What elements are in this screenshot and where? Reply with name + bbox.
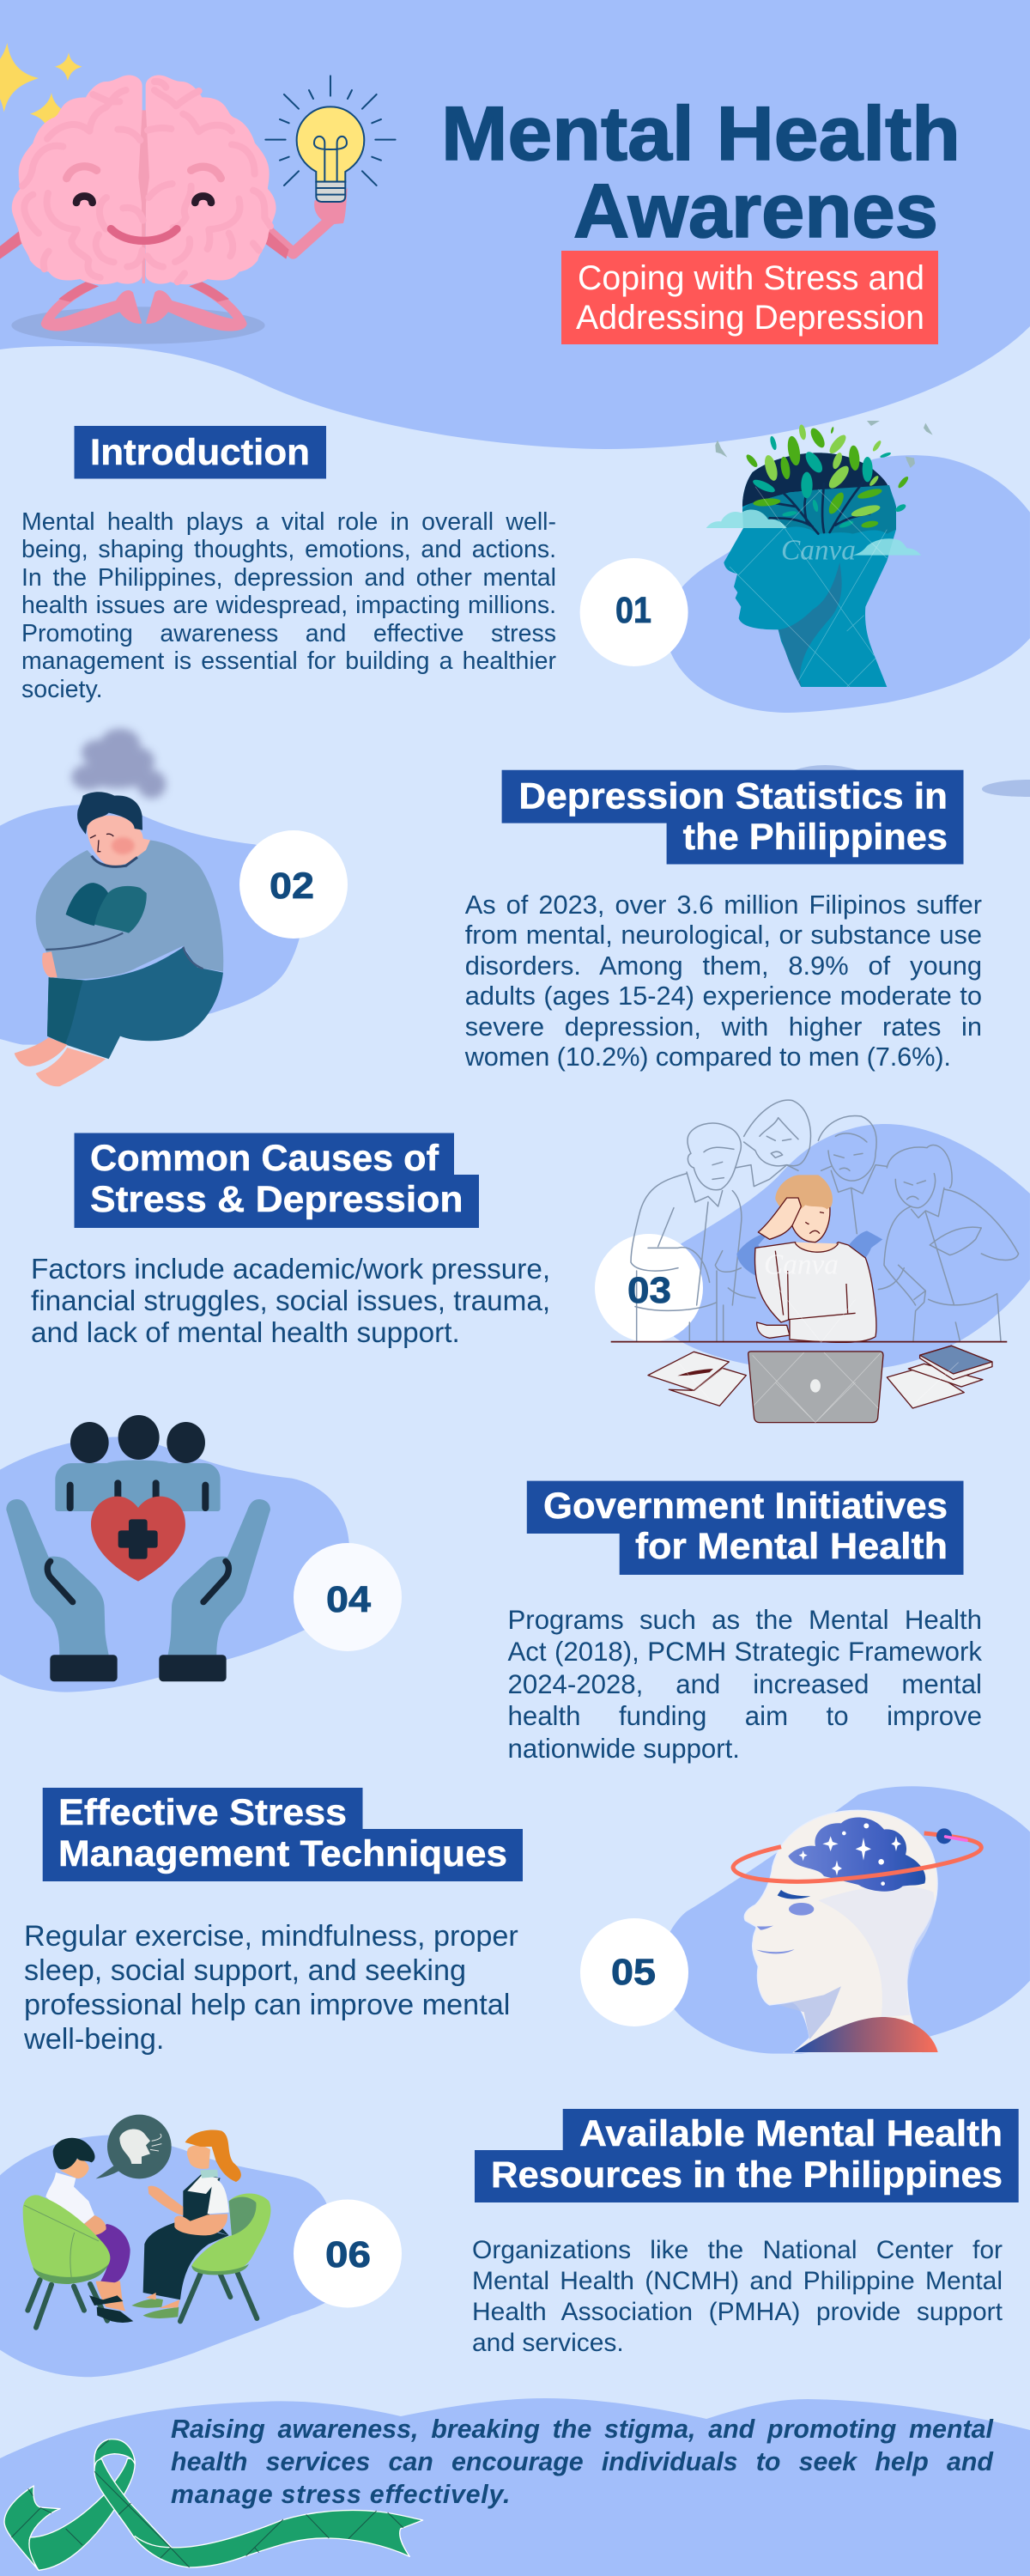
closing statement: manage stress effectively. <box>171 2480 511 2509</box>
heading: Common Causes: Common Causes of <box>90 1138 439 1179</box>
icon: profile head with starry cloud and orbit <box>733 1810 981 2052</box>
icon: green awareness ribbon <box>4 2439 423 2570</box>
header background wave <box>0 0 1030 449</box>
blob 04 <box>0 1437 349 1692</box>
heading: Government Initiatives: Government Initiatives <box>543 1485 948 1527</box>
number badge 06 <box>294 2200 402 2308</box>
text block: depression statistics: severe depression, with higher rates in <box>465 1012 982 1042</box>
text block: stress management <box>24 1920 518 2056</box>
text block: depression statistics: adults (ages 15-24) experience moderate to <box>465 981 982 1011</box>
number badge 03 circle <box>595 1234 703 1342</box>
text block: stress management: professional help can improve mental <box>24 1989 510 2021</box>
heading: Common Causes: Stress & Depression <box>90 1179 464 1220</box>
closing statement: Raising awareness, breaking the stigma, and promoting mental <box>171 2415 993 2444</box>
text block: available resources: Organizations like the National Center for <box>472 2236 1003 2263</box>
heading: Common Causes <box>74 1133 479 1228</box>
heading: Introduction <box>74 426 326 479</box>
text block: introduction: society. <box>21 676 103 703</box>
heading: Depression Statistics <box>502 770 963 864</box>
panel: government initiatives illustration and number <box>0 1415 402 1692</box>
icon: caring hands, people and heart <box>6 1415 270 1681</box>
blob 01 <box>670 455 1030 713</box>
text block: depression statistics: As of 2023, over 3.6 million Filipinos suffer <box>465 890 982 920</box>
icon: head with growing tree <box>706 421 933 687</box>
blob 06 <box>0 2136 337 2377</box>
number badge 01: 01 <box>615 590 651 631</box>
panel: stress management illustration and number <box>580 1786 1030 2054</box>
text block: introduction: management is essential for building a healthier <box>21 647 556 675</box>
text block: government initiatives: nationwide support. <box>508 1734 740 1764</box>
number badge 06: 06 <box>325 2234 371 2275</box>
decorative side ellipse <box>794 765 1030 797</box>
text block: government initiatives: Act (2018), PCMH Strategic Framework <box>508 1637 982 1667</box>
blob 02 <box>0 805 305 1045</box>
icon: two people talking in chairs <box>23 2115 270 2328</box>
number badge 02: 02 <box>270 866 314 907</box>
heading: Government Initiatives: for Mental Health <box>635 1526 948 1567</box>
text block: available resources: Mental Health (NCMH) and Philippine Mental <box>472 2267 1003 2294</box>
heading: Introduction: Introduction <box>90 432 310 473</box>
text block: common causes <box>31 1254 550 1349</box>
panel: causes illustration and number <box>595 1100 1030 1423</box>
illustration: smiling brain holding a light bulb <box>0 43 396 344</box>
title <box>441 90 960 253</box>
icon: sparkles <box>0 43 82 135</box>
text block: government initiatives: health funding aim to improve <box>508 1701 982 1731</box>
icon: stressed person surrounded by critics <box>611 1100 1019 1423</box>
text block: depression statistics <box>465 890 982 1072</box>
text block: depression statistics: from mental, neurological, or substance use <box>465 920 982 950</box>
text block: introduction: health issues are widespread, impacting millions. <box>21 592 556 619</box>
icon: light bulb <box>265 76 396 202</box>
text block: depression statistics: women (10.2%) compared to men (7.6%). <box>465 1042 951 1072</box>
panel: depression statistics illustration and number <box>0 728 1030 1086</box>
subtitle box: Coping with Stress and <box>578 259 924 297</box>
closing statement: health services can encourage individuals to seek help and <box>171 2447 993 2476</box>
blob 03 <box>674 1124 1030 1371</box>
panel: introduction illustration and number <box>580 421 1030 713</box>
icon: stressed person surrounded by critics: Canva <box>764 1249 839 1280</box>
heading: Available Resources <box>475 2109 1019 2202</box>
text block: available resources: Health Association (PMHA) provide support <box>472 2298 1003 2325</box>
closing statement <box>171 2415 994 2509</box>
text block: introduction: In the Philippines, depression and other mental <box>21 564 556 592</box>
text block: introduction: being, shaping thoughts, emotions, and actions. <box>21 536 556 563</box>
number badge 04: 04 <box>326 1579 371 1620</box>
text block: stress management: well-being. <box>24 2023 164 2056</box>
text block: common causes: Factors include academic/work pressure, <box>31 1254 550 1285</box>
heading: Government Initiatives <box>527 1481 963 1575</box>
text block: common causes: financial struggles, social issues, trauma, <box>31 1285 550 1317</box>
text block: stress management: sleep, social support, and seeking <box>24 1954 466 1987</box>
footer wave <box>0 2398 1030 2576</box>
icon: sad seated person with cloud <box>15 728 223 1086</box>
number 03: 03 <box>627 1270 671 1311</box>
icon: head with growing tree: Canva <box>781 535 856 567</box>
text block: stress management: Regular exercise, mindfulness, proper <box>24 1920 518 1953</box>
text block: available resources: and services. <box>472 2329 624 2356</box>
number badge 05: 05 <box>611 1952 656 1993</box>
text block: introduction <box>21 508 556 703</box>
number badge 02 <box>239 830 348 939</box>
text block: government initiatives <box>508 1605 982 1764</box>
panel: resources illustration and number <box>0 2115 402 2377</box>
number badge 05 <box>580 1918 688 2026</box>
text block: depression statistics: disorders. Among them, 8.9% of young <box>465 951 982 981</box>
text block: government initiatives: 2024-2028, and increased mental <box>508 1669 982 1699</box>
text block: common causes: and lack of mental health support. <box>31 1317 460 1349</box>
blob 05 <box>658 1786 1030 2054</box>
number badge 01 <box>580 558 688 666</box>
text block: government initiatives: Programs such as the Mental Health <box>508 1605 982 1635</box>
heading: Effective Stress: Effective Stress <box>58 1792 347 1833</box>
heading: Depression Statistics: the Philippines <box>683 817 948 858</box>
title: Mental Health <box>441 90 960 176</box>
number badge 04 <box>294 1543 402 1651</box>
heading: Effective Stress: Management Techniques <box>58 1833 507 1874</box>
heading: Available Resources: Available Mental Health <box>579 2113 1003 2154</box>
subtitle box: Addressing Depression <box>576 299 924 337</box>
heading: Available Resources: Resources in the Philippines <box>491 2154 1003 2196</box>
heading: Effective Stress <box>43 1788 523 1881</box>
text block: introduction: Mental health plays a vital role in overall well- <box>21 508 556 536</box>
text block: available resources <box>472 2236 1003 2356</box>
title: Awarenes <box>573 167 938 253</box>
heading: Depression Statistics: Depression Statistics in <box>518 776 948 817</box>
text block: introduction: Promoting awareness and effective stress <box>21 620 556 647</box>
subtitle box <box>561 251 938 344</box>
